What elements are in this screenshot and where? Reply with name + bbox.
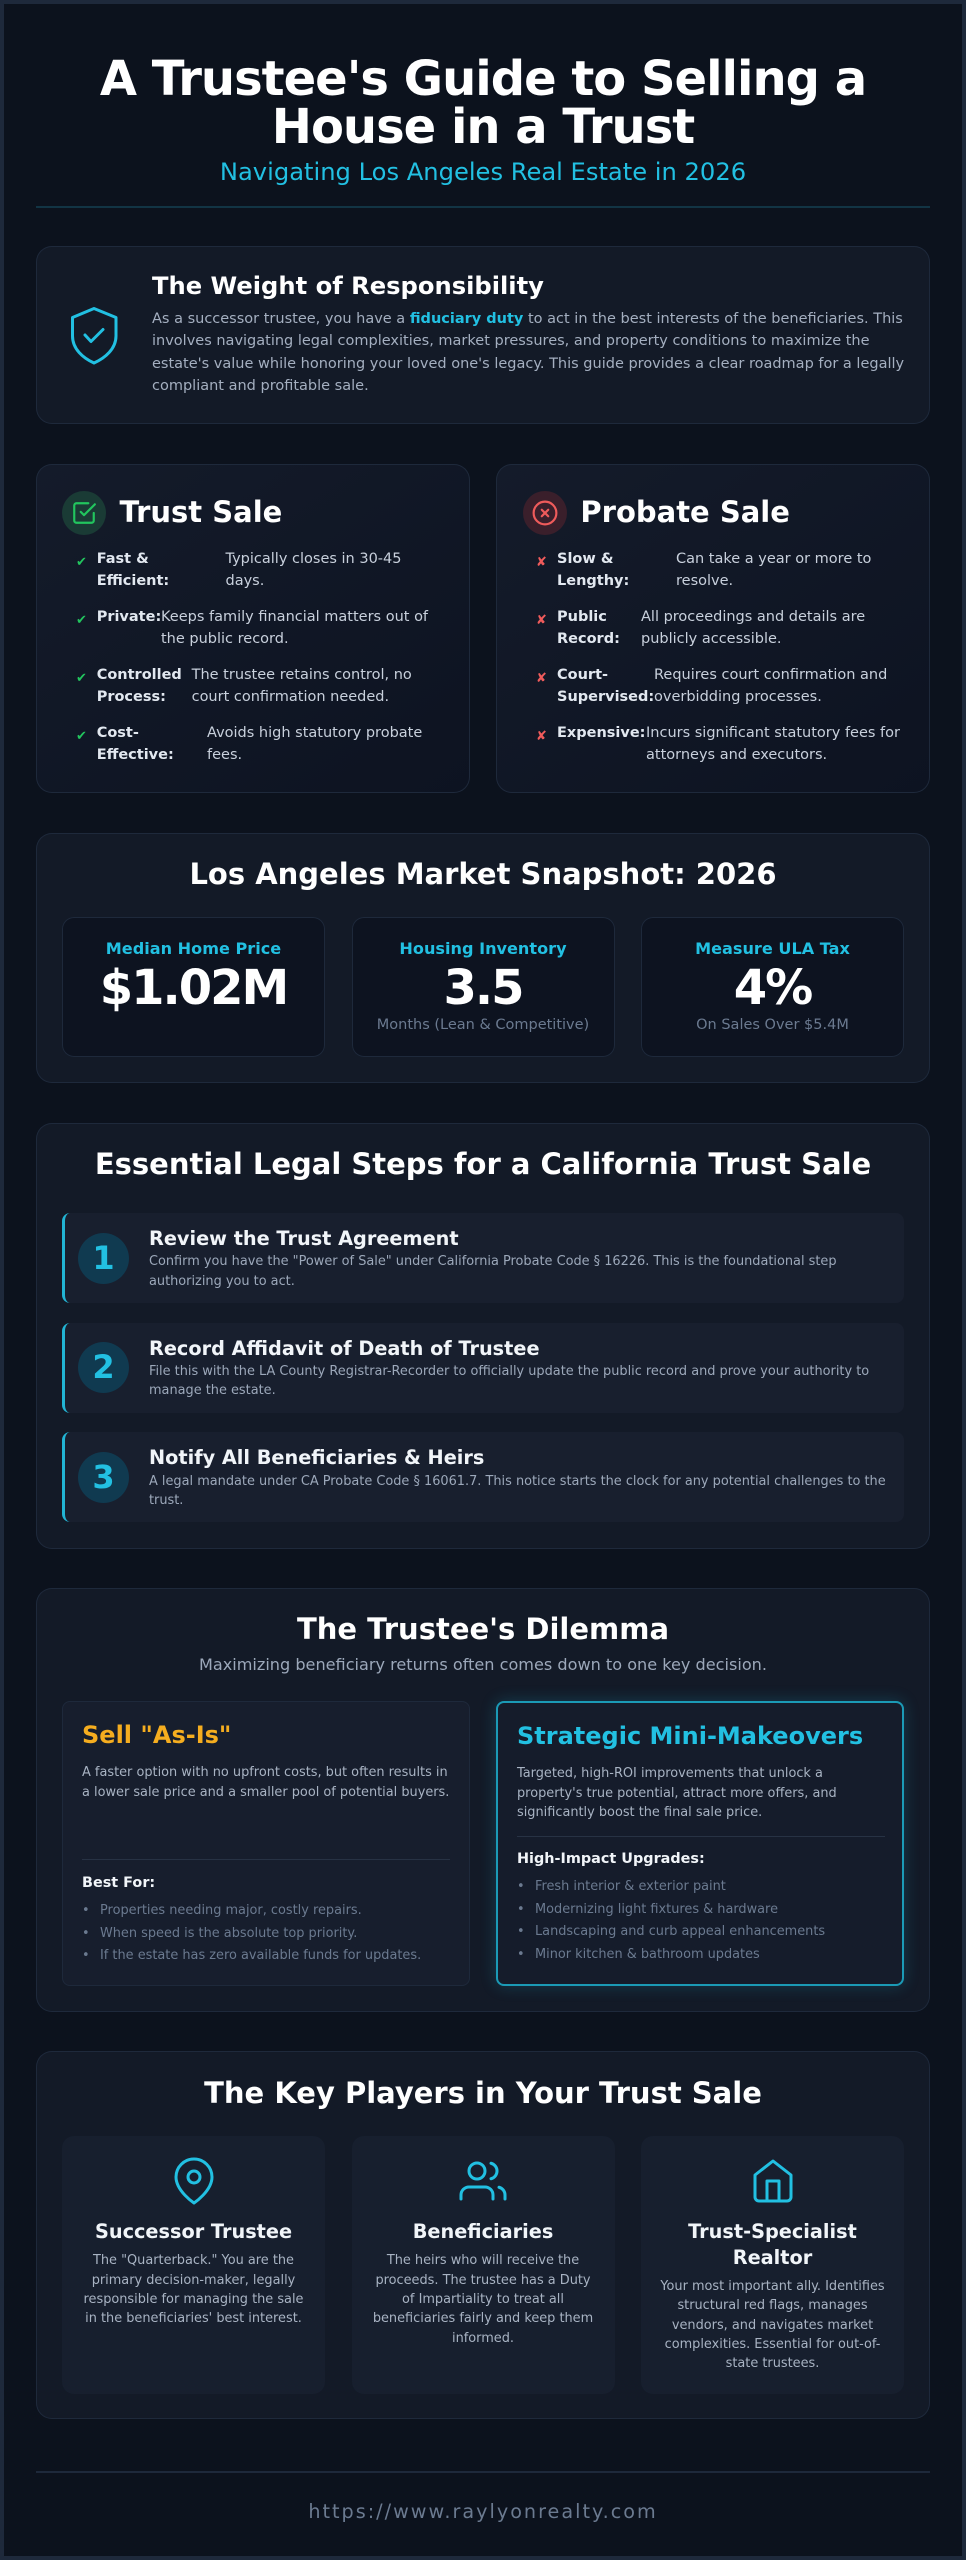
panel: the weight of responsibility	[36, 246, 930, 424]
item: expensive: Expensive:	[557, 725, 645, 741]
item: court-supervised: Requires court confirmation and	[654, 667, 887, 683]
step description	[149, 1254, 837, 1289]
description	[373, 2253, 593, 2346]
stat: median home price	[62, 917, 325, 1057]
body text: compliant and profitable sale.	[152, 378, 369, 394]
item: cost-effective: ✔	[76, 729, 87, 744]
step description: authorizing you to act.	[149, 1274, 295, 1289]
heading: Essential Legal Steps for a California Trust Sale	[95, 1147, 871, 1181]
description: The "Quarterback." You are the	[93, 2253, 294, 2268]
description: complexities. Essential for out-of-	[665, 2337, 880, 2352]
header divider	[36, 206, 930, 208]
option description	[82, 1765, 449, 1800]
item: fast and efficient: Typically closes in 30-45	[226, 551, 402, 567]
body text: estate's value while honoring your loved one's legacy. This guide provides a clear roadmap for a legally	[152, 356, 904, 372]
panel: trust sale	[36, 464, 470, 793]
bullet list	[517, 1879, 825, 1962]
panel: legal steps	[36, 1123, 930, 1549]
option: sell as-is	[62, 1701, 470, 1986]
step title: Review the Trust Agreement	[149, 1227, 459, 1250]
item: slow and lengthy	[536, 551, 871, 589]
step title: Record Affidavit of Death of Trustee	[149, 1337, 540, 1360]
item: private: Private:	[97, 609, 161, 625]
item: expensive: ✘	[536, 729, 547, 744]
item: public record: publicly accessible.	[641, 631, 782, 647]
step description: trust.	[149, 1493, 183, 1508]
bullet list: Landscaping and curb appeal enhancements	[535, 1924, 825, 1939]
bullet list: •	[82, 1903, 90, 1918]
item: cost-effective	[76, 725, 422, 763]
item: expensive	[536, 725, 900, 763]
item: court-supervised: Supervised:	[557, 689, 654, 705]
item: controlled process: court confirmation needed.	[192, 689, 389, 705]
item: slow and lengthy: Slow &	[557, 551, 613, 567]
item: court-supervised: Court-	[557, 667, 608, 683]
item: private: ✔	[76, 613, 87, 628]
number badge: 1	[92, 1238, 115, 1276]
description: Your most important ally. Identifies	[660, 2279, 885, 2294]
step description	[149, 1364, 869, 1398]
bullet list: •	[82, 1948, 90, 1963]
icon: house	[754, 2160, 792, 2202]
header	[36, 50, 930, 208]
player: beneficiaries	[352, 2136, 614, 2394]
description	[84, 2253, 303, 2326]
panel: probate sale	[496, 464, 930, 793]
heading: The Key Players in Your Trust Sale	[204, 2076, 762, 2110]
step description: Confirm you have the "Power of Sale" under California Probate Code § 16226. This is the foundational step	[149, 1254, 837, 1269]
bullet list: Modernizing light fixtures & hardware	[535, 1902, 778, 1917]
step 1	[62, 1213, 904, 1303]
value: 3.5	[443, 960, 523, 1016]
heading: Probate Sale	[580, 495, 790, 529]
role: Successor Trustee	[95, 2220, 292, 2243]
option description: significantly boost the final sale price.	[517, 1805, 762, 1820]
sublabel: On Sales Over $5.4M	[696, 1017, 849, 1033]
description: beneficiaries fairly and keep them	[373, 2311, 593, 2326]
icon: map pin	[174, 2158, 214, 2204]
bullet list: •	[82, 1926, 90, 1940]
heading: Los Angeles Market Snapshot: 2026	[189, 857, 777, 891]
bullet list: •	[517, 1924, 525, 1939]
bullet list: •	[517, 1947, 525, 1962]
item: fast and efficient: days.	[226, 573, 264, 589]
item: slow and lengthy: ✘	[536, 555, 547, 570]
item: cost-effective: Avoids high statutory probate	[207, 725, 422, 741]
number badge: 3	[92, 1458, 115, 1496]
item: fast and efficient: Fast &	[97, 551, 149, 567]
item: court-supervised: overbidding processes.	[654, 689, 822, 705]
role: Trust-Specialist	[688, 2220, 857, 2243]
step description: File this with the LA County Registrar-Recorder to officially update the public record and prove your authority to	[149, 1364, 869, 1379]
step 3	[62, 1432, 904, 1522]
panel: market snapshot	[36, 833, 930, 1083]
label: Measure ULA Tax	[695, 939, 850, 958]
item: court-supervised: ✘	[536, 671, 547, 686]
upgrades label: High-Impact Upgrades:	[517, 1851, 705, 1867]
description: The heirs who will receive the	[387, 2253, 579, 2268]
item: public record	[536, 609, 865, 647]
item: slow and lengthy: Lengthy:	[557, 573, 629, 589]
body text	[152, 311, 904, 394]
role: Beneficiaries	[413, 2220, 553, 2243]
title: House in a Trust	[272, 98, 694, 154]
bullet list: When speed is the absolute top priority.	[100, 1926, 357, 1940]
item: fast and efficient: Efficient:	[97, 573, 169, 589]
description: in the beneficiaries' best interest.	[85, 2311, 302, 2326]
step description	[149, 1474, 886, 1508]
stat: housing inventory	[352, 917, 614, 1057]
item: cost-effective: fees.	[207, 747, 242, 763]
description: proceeds. The trustee has a Duty	[375, 2273, 591, 2288]
role	[688, 2220, 857, 2269]
number badge: 2	[92, 1348, 115, 1386]
step description: A legal mandate under CA Probate Code § 16061.7. This notice starts the clock for any potential challenges to the	[149, 1474, 886, 1489]
panel: the trustee's dilemma	[36, 1588, 930, 2012]
label: Housing Inventory	[399, 939, 567, 958]
item: cost-effective: Cost-	[97, 725, 139, 741]
item: controlled process	[76, 667, 412, 705]
subtitle: Navigating Los Angeles Real Estate in 2026	[220, 158, 746, 186]
subheading: Maximizing beneficiary returns often comes down to one key decision.	[199, 1655, 767, 1674]
item: cost-effective: Effective:	[97, 747, 174, 763]
item: fast and efficient	[76, 551, 402, 589]
item: private: the public record.	[161, 631, 289, 647]
item: expensive: attorneys and executors.	[646, 747, 827, 763]
option title: Strategic Mini-Makeovers	[517, 1722, 863, 1750]
description: structural red flags, manages	[677, 2298, 868, 2313]
bullet list: •	[517, 1902, 525, 1917]
icon: shield check	[71, 307, 118, 364]
description	[660, 2279, 885, 2371]
number badge	[78, 1232, 129, 1284]
heading: The Trustee's Dilemma	[297, 1612, 669, 1646]
item: controlled process: Process:	[97, 689, 166, 705]
icon: users	[460, 2162, 506, 2200]
option title: Sell "As-Is"	[82, 1721, 231, 1749]
body text: As a successor trustee, you have a fiduciary duty to act in the best interests of the beneficiaries. This	[152, 311, 903, 327]
description: vendors, and navigates market	[672, 2318, 873, 2333]
description: of Impartiality to treat all	[402, 2292, 564, 2307]
description: primary decision-maker, legally	[92, 2273, 295, 2288]
item: controlled process: ✔	[76, 671, 87, 686]
panel: key players	[36, 2051, 930, 2419]
sublabel: Months (Lean & Competitive)	[377, 1017, 589, 1033]
item: slow and lengthy: Can take a year or more to	[676, 551, 871, 567]
item: public record: Public	[557, 609, 607, 625]
item: public record: All proceedings and details are	[641, 609, 865, 625]
option: strategic mini-makeovers	[496, 1701, 904, 1986]
option description: a lower sale price and a smaller pool of potential buyers.	[82, 1785, 449, 1800]
icon: check square	[62, 491, 106, 535]
player: successor trustee	[62, 2136, 325, 2394]
body text: involves navigating legal complexities, market pressures, and property conditions to maximize the	[152, 333, 870, 349]
option description: A faster option with no upfront costs, but often results in	[82, 1765, 448, 1780]
item: controlled process: The trustee retains control, no	[192, 667, 412, 683]
best for label: Best For:	[82, 1875, 155, 1891]
option description: Targeted, high-ROI improvements that unlock a	[517, 1766, 823, 1781]
title	[100, 50, 866, 154]
item: controlled process: Controlled	[97, 667, 182, 683]
item: private: Keeps family financial matters out of	[161, 609, 428, 625]
item: public record: ✘	[536, 613, 547, 628]
stat: measure ula tax	[641, 917, 904, 1057]
role: Realtor	[733, 2246, 812, 2269]
description: responsible for managing the sale	[84, 2292, 303, 2307]
icon: x circle	[523, 491, 567, 535]
item: public record: Record:	[557, 631, 620, 647]
bullet list: Minor kitchen & bathroom updates	[535, 1947, 760, 1962]
heading: Trust Sale	[120, 495, 282, 529]
item: expensive: Incurs significant statutory fees for	[646, 725, 900, 741]
item: private	[76, 609, 428, 647]
footer	[36, 2471, 930, 2531]
player: trust-specialist realtor	[641, 2136, 904, 2394]
bullet list: Fresh interior & exterior paint	[535, 1879, 726, 1894]
bullet list: Properties needing major, costly repairs.	[100, 1903, 362, 1918]
item: fast and efficient: ✔	[76, 555, 87, 570]
item: court-supervised	[536, 667, 887, 705]
label: Median Home Price	[106, 939, 281, 958]
description: state trustees.	[726, 2356, 819, 2371]
description: informed.	[452, 2331, 514, 2346]
item: slow and lengthy: resolve.	[676, 573, 733, 589]
title: A Trustee's Guide to Selling a	[100, 50, 866, 106]
step 2	[62, 1323, 904, 1413]
website url: https://www.raylyonrealty.com	[308, 2500, 658, 2523]
value: $1.02M	[100, 960, 287, 1016]
heading: The Weight of Responsibility	[152, 272, 544, 300]
bullet list: •	[517, 1879, 525, 1894]
number badge	[78, 1342, 129, 1393]
option description	[516, 1766, 837, 1820]
bullet list: If the estate has zero available funds for updates.	[100, 1948, 421, 1963]
option description: property's true potential, attract more offers, and	[517, 1786, 837, 1801]
bullet list	[82, 1903, 421, 1963]
number badge	[78, 1452, 129, 1503]
step description: manage the estate.	[149, 1383, 276, 1398]
step title: Notify All Beneficiaries & Heirs	[149, 1446, 484, 1469]
value: 4%	[734, 960, 811, 1016]
